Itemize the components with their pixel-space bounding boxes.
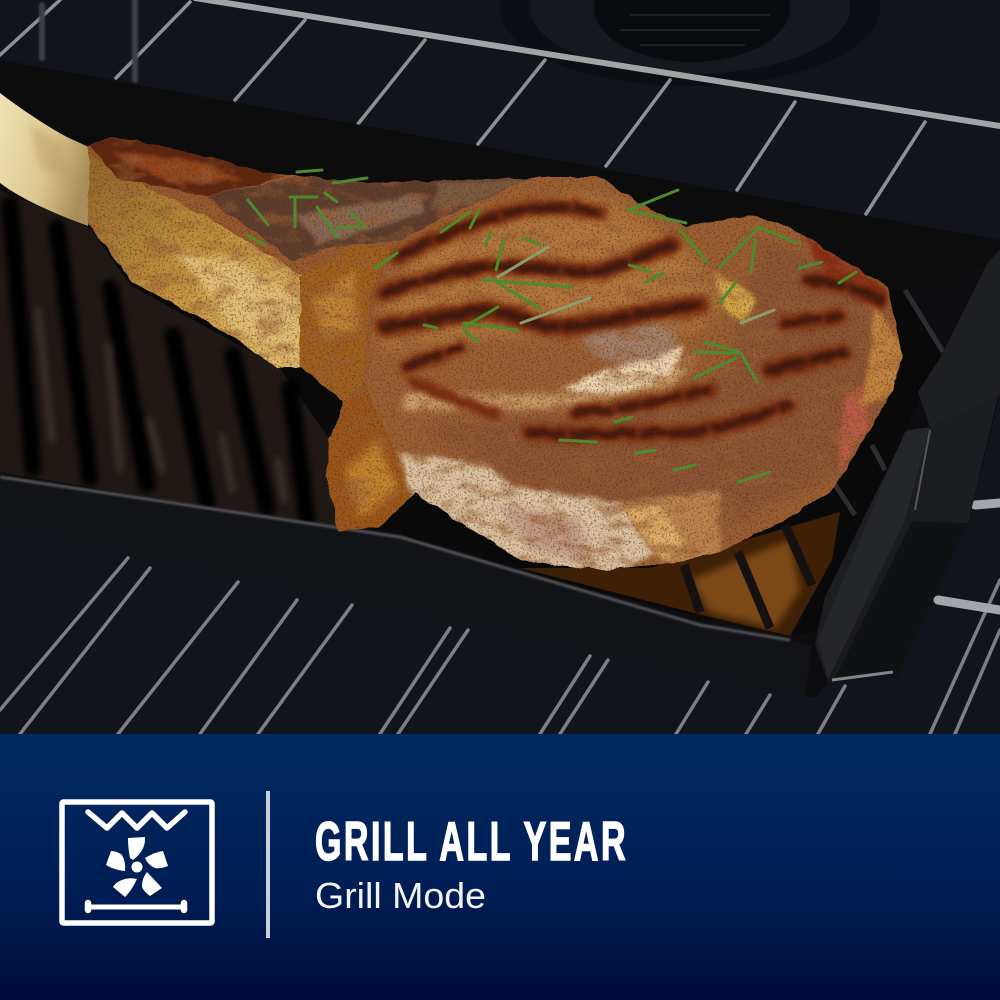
pan back wall [0, 60, 988, 292]
steak [80, 130, 910, 580]
right side inner ridges [832, 290, 943, 515]
taupe centre [584, 318, 676, 362]
lower-left cap [320, 392, 418, 535]
pan interior floor [0, 190, 945, 638]
icon: oven grill mode [62, 802, 212, 923]
front rim of pan [0, 475, 812, 697]
gold fat pocket [713, 272, 757, 322]
pan handle [815, 395, 1000, 682]
oven back fan cover [500, 0, 880, 86]
photo: steak on grill pan in oven [0, 0, 1000, 734]
cream lobe [560, 345, 683, 394]
lower gold fold [621, 490, 720, 570]
heading: GRILL ALL YEAR [315, 810, 628, 872]
grill pan [0, 60, 1000, 697]
icon: top grill element [88, 812, 185, 828]
divider [266, 791, 270, 938]
rib dark crust [89, 137, 284, 196]
side cap [300, 247, 393, 405]
pan outer body [0, 60, 1000, 697]
tomahawk bone [0, 93, 95, 226]
lower pale edge [399, 453, 659, 580]
lower right meat [420, 240, 895, 530]
grill marks [384, 207, 881, 434]
meat grain and pepper [80, 130, 910, 575]
upper oven rack [0, 0, 1000, 214]
drippings in pan [520, 512, 840, 636]
subheading: Grill Mode [315, 875, 486, 916]
pan ridge channels [10, 205, 307, 518]
rosemary garnish [247, 170, 856, 482]
band of pale fat under centre [400, 350, 700, 410]
steak base [80, 130, 910, 575]
grill mark glow [384, 207, 881, 434]
right rim pink [838, 380, 872, 470]
icon: fan blades [106, 837, 168, 897]
mottled browning [80, 130, 910, 575]
oven interior [0, 0, 1000, 734]
floor between ridges [0, 190, 338, 530]
icon: bottom element [88, 904, 184, 910]
bottom banner [0, 734, 1000, 1000]
upper steak golden crust [380, 192, 725, 350]
lower oven rack [0, 503, 1000, 734]
steak main round [378, 176, 903, 571]
rib taupe meat [208, 176, 532, 262]
right rim of pan [918, 250, 1000, 427]
rib fat body [80, 150, 305, 375]
pan ridge highlights [38, 310, 284, 500]
